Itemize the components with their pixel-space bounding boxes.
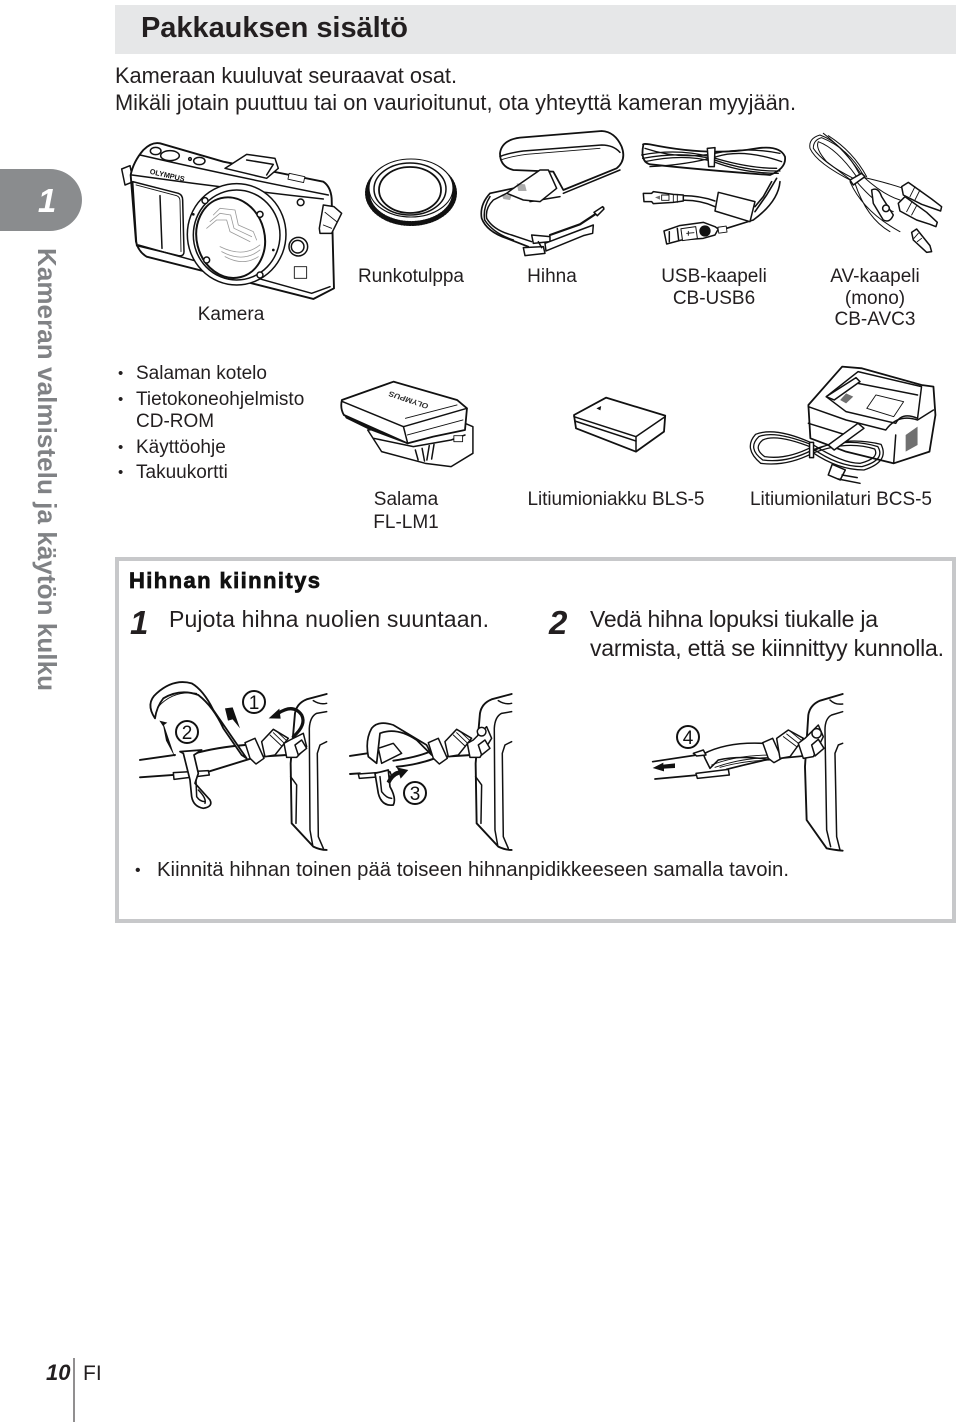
intro text: Mikäli jotain puuttuu tai on vaurioitunut, ota yhteyttä kameran myyjään. — [115, 90, 796, 115]
accessory list — [118, 363, 304, 483]
step 2: 2 — [548, 604, 568, 641]
label: USB cable: CB-USB6 — [673, 288, 755, 309]
step 1: 1 — [130, 604, 148, 641]
label: AV cable: (mono) — [845, 288, 905, 309]
icon: strap — [481, 131, 623, 256]
illustration: threading the strap — [140, 682, 512, 850]
chapter tab: 1 — [38, 182, 56, 219]
label: USB cable — [661, 266, 767, 309]
label: Runkotulppa: Runkotulppa — [358, 266, 464, 287]
accessory list: • — [118, 365, 123, 382]
label: Hihna: Hihna — [527, 266, 577, 287]
icon: flash: OLYMPUS — [387, 389, 430, 410]
footer page number — [46, 1358, 102, 1422]
callout number 4 — [677, 726, 699, 749]
label: AV cable — [830, 266, 920, 330]
icon: AV cable — [810, 133, 942, 252]
chapter tab — [0, 169, 82, 231]
title bar: Pakkauksen sisältö — [141, 12, 408, 44]
icon: charger — [750, 367, 935, 483]
icon: battery — [574, 398, 665, 452]
label: flash: Salama — [374, 489, 439, 510]
footer page number: FI — [83, 1362, 102, 1385]
callout number 2 — [176, 721, 198, 744]
panel heading: Hihnan kiinnitys — [129, 568, 320, 593]
intro text: Kameraan kuuluvat seuraavat osat. — [115, 63, 457, 88]
illustration: tightening the strap — [653, 694, 843, 851]
callout number 1 — [243, 691, 265, 714]
icon: body cap — [366, 159, 456, 225]
label: AV cable: AV-kaapeli — [830, 266, 920, 287]
note: Kiinnitä hihnan toinen pää toiseen hihnanpidikkeeseen samalla tavoin. — [157, 859, 789, 881]
icon: camera — [122, 143, 342, 299]
icon: USB cable — [642, 144, 785, 244]
vertical chapter title: Kameran valmistelu ja käytön kulku — [32, 248, 62, 691]
step 2: Vedä hihna lopuksi tiukalle ja — [590, 606, 878, 632]
callout number 3 — [404, 782, 426, 805]
icon: camera: OLYMPUS — [149, 167, 186, 184]
label: Kamera: Kamera — [198, 304, 265, 325]
panel: attaching the strap — [117, 559, 954, 921]
icon: flash — [341, 382, 473, 467]
label: USB cable: USB-kaapeli — [661, 266, 767, 287]
intro text — [115, 63, 796, 115]
callout number 1: 1 — [249, 693, 259, 714]
footer page number: 10 — [46, 1360, 71, 1385]
accessory list: Takuukortti — [136, 462, 228, 483]
label: flash — [373, 489, 439, 533]
step 2: varmista, että se kiinnittyy kunnolla. — [590, 635, 944, 661]
label: charger: Litiumionilaturi BCS-5 — [750, 489, 932, 510]
step 1 — [130, 604, 489, 641]
accessory list: CD-ROM — [136, 411, 214, 432]
label: battery: Litiumioniakku BLS-5 — [528, 489, 704, 510]
accessory list: Tietokoneohjelmisto — [136, 389, 304, 410]
step 2 — [548, 604, 944, 661]
title bar — [115, 5, 956, 54]
callout number 4: 4 — [683, 728, 694, 749]
accessory list: • — [118, 464, 123, 481]
accessory list: • — [118, 391, 123, 408]
label: AV cable: CB-AVC3 — [835, 309, 915, 330]
note: • — [135, 862, 141, 879]
callout number 2: 2 — [182, 723, 192, 744]
callout number 3: 3 — [410, 784, 420, 805]
label: flash: FL-LM1 — [373, 512, 439, 533]
step 1: Pujota hihna nuolien suuntaan. — [169, 606, 489, 632]
accessory list: Käyttöohje — [136, 437, 226, 458]
accessory list: • — [118, 439, 123, 456]
accessory list: Salaman kotelo — [136, 363, 267, 384]
